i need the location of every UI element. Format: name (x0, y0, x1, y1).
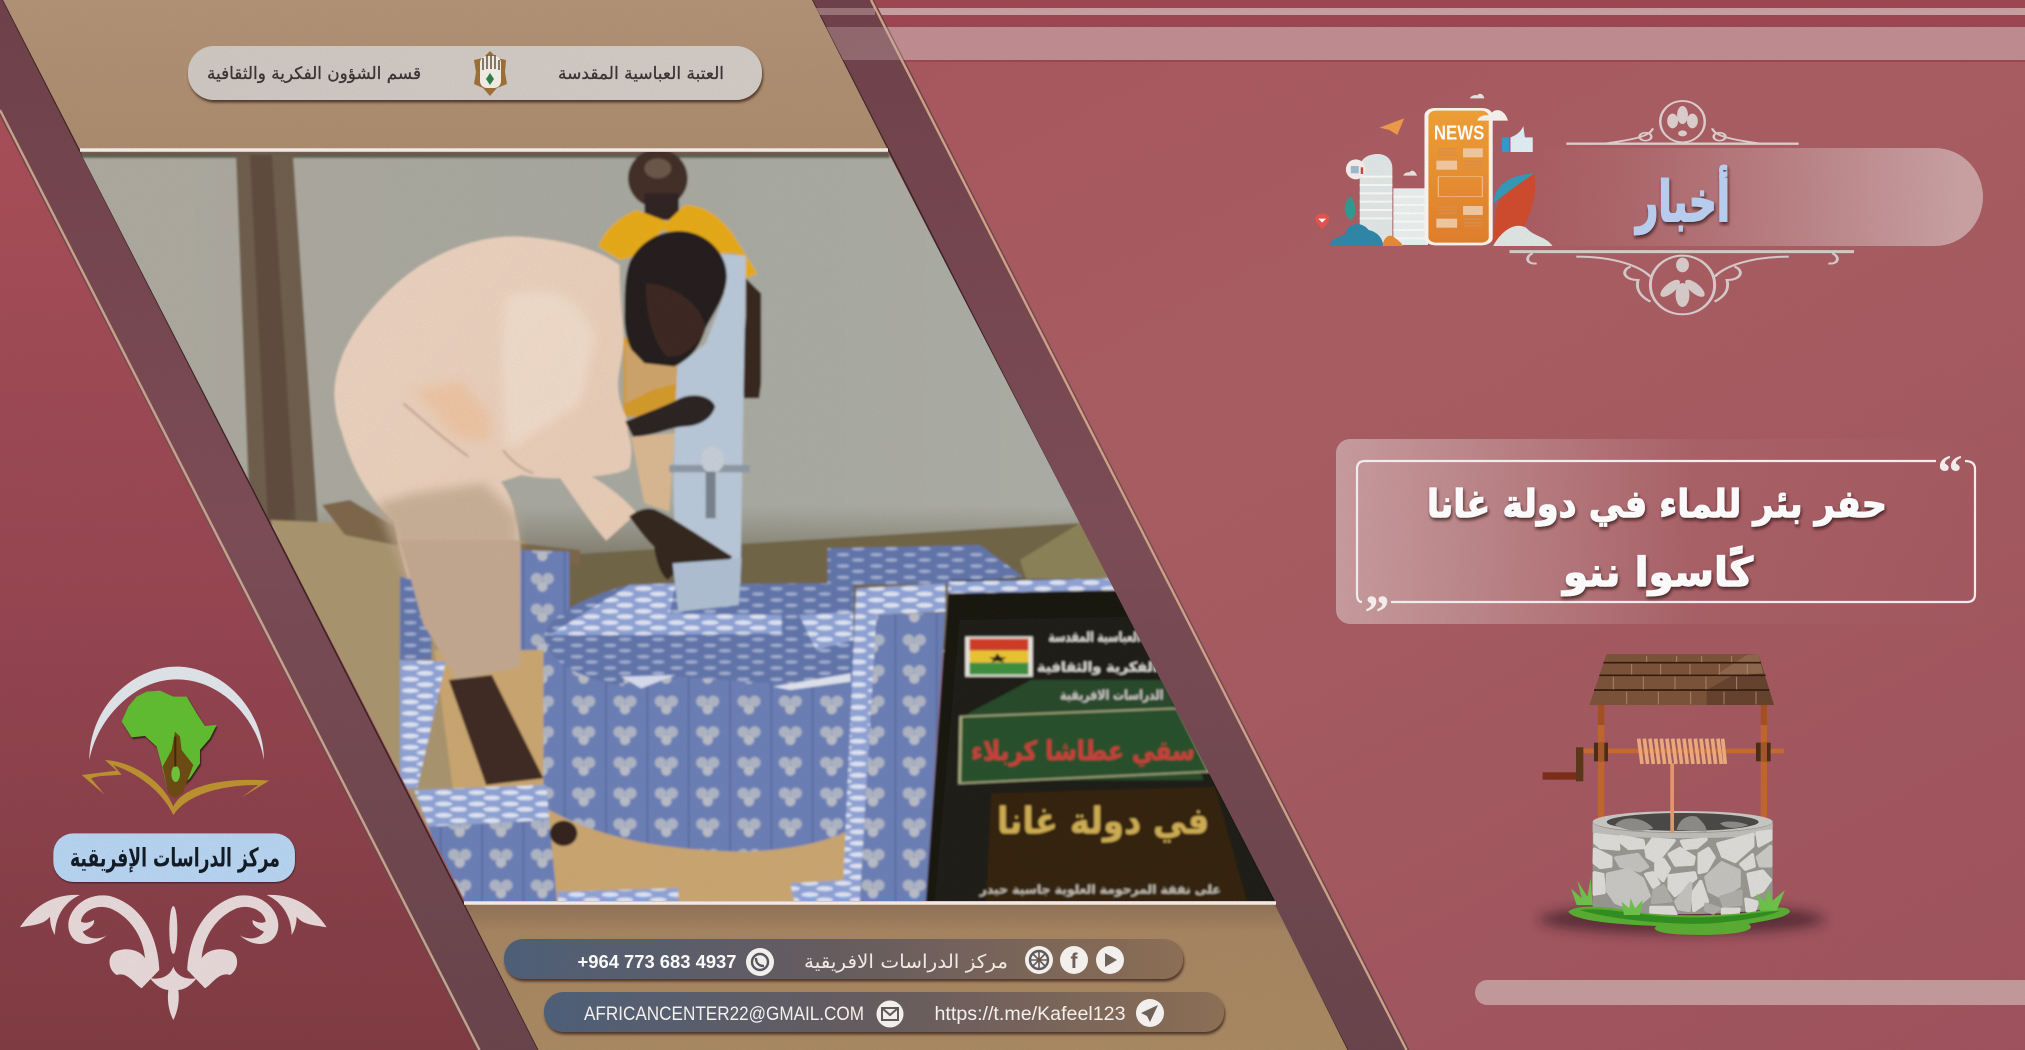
floral ornament (20, 895, 327, 1020)
water pump and boy, coordinates of detail crop A (334, 149, 761, 600)
icon: plant and hills (1315, 196, 1403, 246)
grass base (1568, 907, 1790, 935)
sign text: سقي عطاشا كربلاء (971, 735, 1195, 766)
open book (82, 760, 269, 815)
rope coil (1639, 739, 1725, 764)
ghana flag (965, 637, 1033, 677)
bottom tan panel (464, 903, 1348, 1050)
sign text: على نفقة المرحومة العلوية جاسية حيدر (979, 882, 1221, 897)
tile column (842, 583, 945, 910)
sign board (925, 578, 1318, 910)
man hands (625, 343, 732, 580)
posts (1598, 705, 1767, 823)
white frame (1357, 461, 1975, 602)
floor (434, 650, 871, 910)
africa map (122, 691, 217, 790)
banner title: أخبار (1634, 165, 1730, 235)
headline box (1336, 439, 1990, 640)
man head (624, 231, 727, 369)
top right stripes (845, 0, 2025, 62)
email: AFRICANCENTER22@GMAIL.COM (584, 1004, 864, 1025)
pill shape (188, 46, 762, 100)
hanging rope (1670, 763, 1674, 833)
photo: man drinking at water pump (80, 149, 1318, 910)
background: left crimson triangle (0, 116, 477, 1050)
tiled cylinder (544, 583, 853, 852)
pen nib (163, 732, 193, 798)
left tile walls (400, 577, 848, 910)
bottom right pale bar (1475, 980, 2025, 1005)
phone number: +964 773 683 4937 (578, 952, 736, 972)
NEWS label: NEWS (1434, 122, 1484, 144)
banner pill (1532, 148, 1983, 246)
man garment (334, 237, 637, 600)
center name: مركز الدراسات الافريقية (804, 951, 1008, 973)
logo: African Studies Center (20, 667, 327, 1020)
icon: thumbs up (1502, 126, 1533, 152)
back tile block left (518, 550, 569, 650)
icon: city buildings (1346, 154, 1428, 245)
icon: telegram (1136, 999, 1164, 1027)
icon: paper plane (1380, 118, 1404, 135)
pill: email and telegram (544, 992, 1224, 1032)
pump base (673, 558, 742, 612)
name pill (53, 833, 295, 882)
header text right: العتبة العباسية المقدسة (558, 64, 724, 84)
headline line 1: حفر بئر للماء في دولة غانا (1427, 482, 1887, 527)
ground sand (270, 499, 1108, 834)
sign text: العباسية المقدسة (1049, 630, 1140, 645)
name text: مركز الدراسات الإفريقية (70, 844, 280, 874)
header pill (188, 46, 762, 100)
man legs and feet (400, 540, 577, 846)
back tile block right (828, 545, 1023, 585)
top ornament (1566, 101, 1799, 144)
grass tufts (1571, 878, 1785, 915)
icon: mail (876, 1000, 904, 1028)
quote mark top: “ (1938, 444, 1962, 500)
quote mark bottom: ” (1364, 584, 1390, 640)
contact pills (504, 939, 1224, 1032)
sign text (971, 630, 1221, 897)
sign text: في دولة غانا (997, 800, 1209, 843)
ground shadow (1538, 905, 1825, 934)
headline line 2: كًاسوا ننو (1561, 545, 1754, 596)
icon: clouds (1403, 94, 1508, 176)
tiled well base and sign, coordinates of detail crop B (400, 540, 1318, 910)
icon: youtube (1096, 946, 1124, 974)
icon: feather leaf (1493, 173, 1553, 246)
sign text: الدراسات الافريقية (1060, 688, 1163, 703)
well stone body (1593, 811, 1773, 914)
crescent (89, 667, 264, 760)
left diagonal band (0, 0, 538, 1050)
icon: whatsapp (746, 948, 774, 976)
translucent panel (1336, 439, 1990, 624)
axle and crank (1543, 743, 1784, 781)
pump pole (669, 253, 750, 600)
icon: phone with NEWS (1424, 108, 1493, 245)
boy (599, 149, 761, 512)
roof (1589, 654, 1774, 705)
wall (80, 152, 1180, 652)
bottom ornament (1510, 252, 1854, 314)
sign text: الفكرية والثقافية (1037, 660, 1158, 675)
telegram link: https://t.me/Kafeel123 (934, 1004, 1126, 1025)
photo frame lines (80, 150, 1276, 903)
pill: phone and social (504, 939, 1183, 979)
news illustration (1315, 94, 1553, 246)
icon: facebook (1060, 946, 1088, 974)
well illustration (1538, 654, 1825, 935)
top tan panel (3, 0, 888, 150)
right diagonal band (812, 0, 1410, 1050)
icon: website (1025, 946, 1053, 974)
icon: hand emblem (474, 51, 507, 96)
header text left: قسم الشؤون الفكرية والثقافية (207, 64, 421, 84)
icon: facebook: f (1070, 950, 1078, 973)
news banner (1315, 94, 1983, 314)
